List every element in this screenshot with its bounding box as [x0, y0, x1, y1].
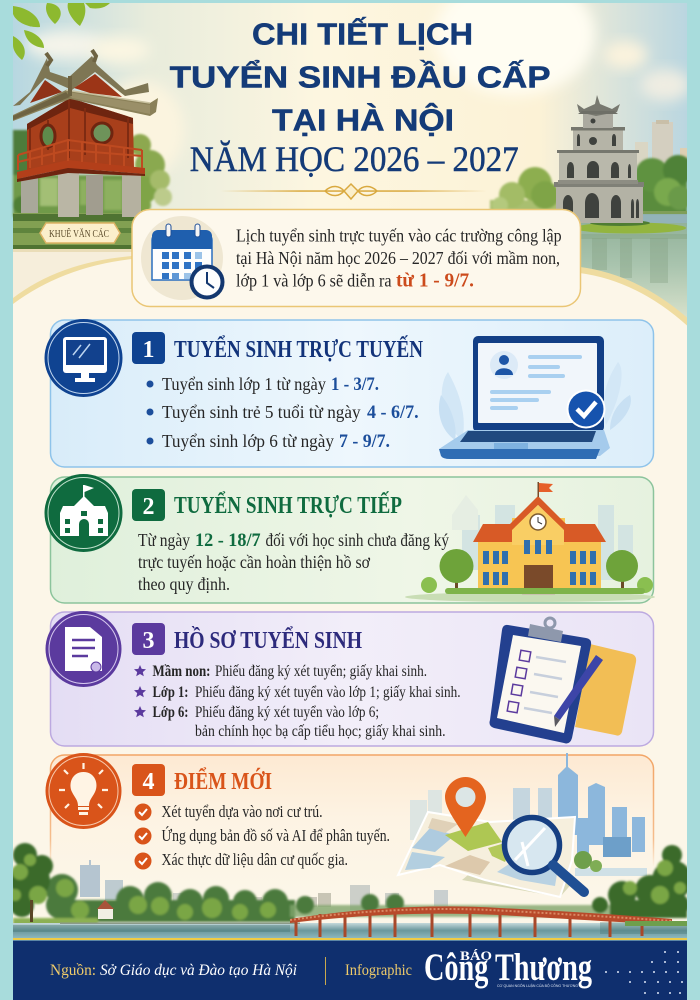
bullet list: online dates: Tuyển sinh lớp 1 từ ngày	[162, 374, 326, 394]
illustration: city skyline	[410, 753, 647, 876]
number badge 3: 3	[142, 628, 154, 654]
title: CHI TIẾT LỊCH	[252, 17, 473, 52]
document list: Lớp 6:	[152, 704, 188, 721]
number badge 2	[132, 489, 165, 521]
logo: Báo Công Thương: Công Thương	[424, 946, 592, 989]
logo: Báo Công Thương: CƠ QUAN NGÔN LUẬN CỦA BỘ CÔNG THƯƠNG	[497, 983, 578, 988]
title: TUYỂN SINH ĐẦU CẤP	[170, 60, 551, 95]
heading: new points: ĐIỂM MỚI	[174, 768, 272, 795]
bullet list: online dates	[146, 374, 419, 452]
label: Khuê Văn Các	[40, 223, 120, 243]
label: Khuê Văn Các: KHUÊ VĂN CÁC	[49, 228, 109, 240]
illustration: city behind school	[452, 495, 633, 580]
icon: document circle	[46, 611, 122, 687]
number badge 4: 4	[142, 769, 154, 795]
number badge 2: 2	[142, 494, 154, 520]
page background: sky and cream	[13, 3, 687, 209]
document list: Phiếu đăng ký xét tuyển vào lớp 6;	[195, 704, 379, 721]
intro text: lớp 1 và lớp 6 sẽ diễn ra	[236, 271, 392, 291]
checklist: new points: Ứng dụng bản đồ số và AI để phân tuyến.	[162, 826, 390, 845]
in-person description: theo quy định.	[138, 574, 230, 594]
icon: light bulb circle	[46, 753, 122, 829]
illustration: Hoan Kiem lake right	[490, 120, 693, 326]
panel 3: documents	[46, 611, 654, 746]
document list	[134, 663, 461, 740]
intro text: Lịch tuyển sinh trực tuyến vào các trường công lập	[236, 226, 562, 246]
intro box	[132, 210, 580, 306]
icon: calendar with clock	[141, 216, 223, 300]
footer source: Nguồn:	[50, 962, 96, 979]
heading: documents: HỒ SƠ TUYỂN SINH	[174, 627, 362, 654]
checklist: new points	[134, 802, 390, 870]
subtitle: school year: NĂM HỌC 2026 – 2027	[190, 139, 519, 179]
number badge 3	[132, 623, 165, 655]
icon: school circle	[44, 474, 122, 552]
bullet list: online dates: 4 - 6/7.	[367, 402, 419, 423]
panel 2: in-person enrolment	[44, 474, 655, 603]
footer banner	[13, 940, 687, 1000]
in-person description: Từ ngày	[138, 530, 190, 550]
bullet list: online dates: 7 - 9/7.	[339, 431, 390, 452]
in-person description: 12 - 18/7	[195, 530, 261, 551]
in-person description: đối với học sinh chưa đăng ký	[266, 530, 449, 550]
illustration: map with pin and magnifier	[398, 777, 584, 897]
number badge 4	[132, 764, 165, 796]
illustration: school building	[405, 482, 655, 602]
illustration: Turtle Tower	[554, 95, 644, 223]
footer source: Sở Giáo dục và Đào tạo Hà Nội	[100, 962, 297, 979]
document list: Phiếu đăng ký xét tuyển vào lớp 1; giấy khai sinh.	[195, 684, 461, 701]
number badge 1: 1	[142, 337, 154, 363]
panel 4: what's new	[46, 753, 654, 897]
intro text: từ 1 - 9/7.	[396, 270, 474, 292]
document list: Mầm non:	[152, 663, 210, 680]
checklist: new points: Xác thực dữ liệu dân cư quốc gia.	[162, 850, 348, 869]
number badge 1	[132, 332, 165, 364]
in-person description	[138, 530, 449, 594]
title: TẠI HÀ NỘI	[272, 102, 454, 138]
intro text: tại Hà Nội năm học 2026 – 2027 đối với mầm non,	[236, 248, 560, 268]
document list: Phiếu đăng ký xét tuyển; giấy khai sinh.	[215, 663, 427, 680]
ornament divider	[220, 184, 487, 199]
checklist: new points: Xét tuyển dựa vào nơi cư trú.	[162, 802, 322, 821]
document list: Lớp 1:	[152, 684, 188, 701]
document list: bản chính học bạ cấp tiểu học; giấy khai sinh.	[195, 723, 446, 740]
bullet list: online dates: Tuyển sinh lớp 6 từ ngày	[162, 431, 334, 451]
heading: in person: TUYỂN SINH TRỰC TIẾP	[174, 492, 402, 519]
cream arch background	[13, 252, 687, 326]
illustration: West Lake bottom scene with trees and bridge	[9, 843, 692, 940]
heading: online: TUYỂN SINH TRỰC TUYẾN	[174, 336, 424, 363]
illustration: laptop with check	[439, 336, 631, 459]
panel 1: online enrolment	[44, 319, 654, 467]
bullet list: online dates: 1 - 3/7.	[331, 374, 379, 395]
decorative dots	[605, 951, 683, 994]
icon: leaves top left	[13, 3, 110, 60]
bullet list: online dates: Tuyển sinh trẻ 5 tuổi từ ngày	[162, 402, 361, 422]
intro text	[236, 226, 562, 292]
illustration: Khue Van Cac pavilion	[13, 50, 172, 252]
in-person description: trực tuyến hoặc cần hoàn thiện hồ sơ	[138, 552, 371, 572]
icon: monitor circle	[44, 319, 122, 397]
title	[170, 17, 551, 138]
illustration: clipboard, folder and pen	[490, 618, 636, 743]
logo: Báo Công Thương: BÁO	[460, 948, 492, 963]
footer label: Infographic	[345, 962, 412, 979]
